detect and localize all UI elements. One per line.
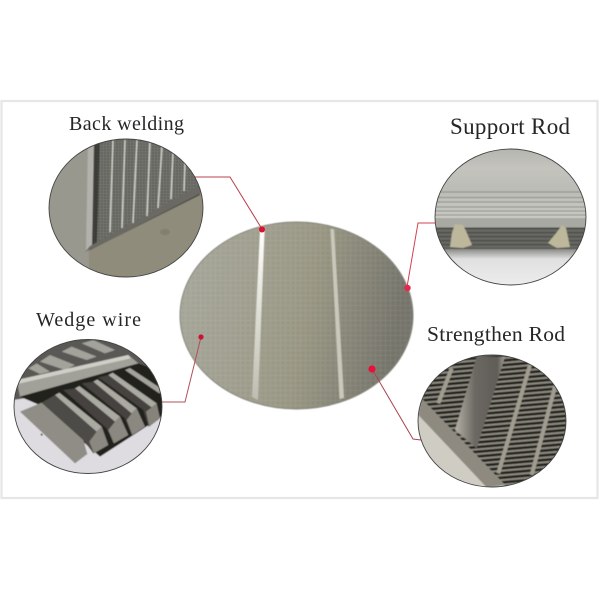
detail: back welding (45, 135, 210, 280)
label: back welding: Back welding (69, 113, 184, 135)
rod: left strengthen (252, 231, 264, 400)
connector: back welding (195, 177, 265, 232)
connector: wedge wire (162, 334, 204, 402)
detail: support rod (430, 145, 590, 289)
label: wedge wire: Wedge wire (36, 309, 141, 331)
label: strengthen rod: Strengthen Rod (427, 322, 565, 346)
rod: right strengthen (330, 229, 344, 399)
detail: wedge wire (10, 337, 167, 477)
connector: strengthen rod (368, 365, 421, 440)
frame (2, 101, 598, 498)
connector: support rod (404, 223, 436, 291)
label: support rod: Support Rod (450, 114, 570, 139)
main disk (180, 222, 413, 409)
detail: strengthen rod (418, 354, 566, 488)
